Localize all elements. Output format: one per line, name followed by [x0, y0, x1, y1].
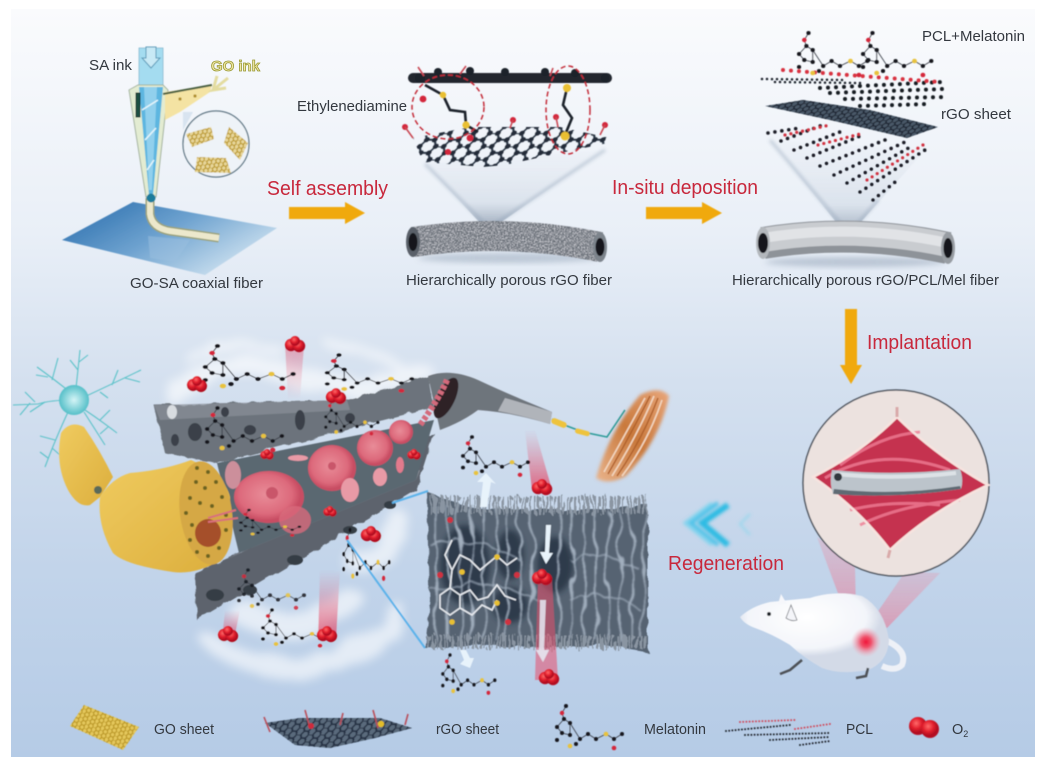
regeneration chevrons — [685, 503, 750, 545]
heading: Implantation: Implantation — [867, 332, 972, 354]
step 2: rGO sheets with ethylenediamine — [402, 66, 612, 225]
legend label: Melatonin: Melatonin — [644, 722, 706, 738]
nerve guide cross-section — [100, 458, 239, 572]
legend label: GO sheet: GO sheet — [154, 722, 214, 738]
step 3: rGO sheets with PCL and melatonin — [762, 31, 945, 232]
label: GO ink: GO ink — [211, 58, 261, 75]
arrow: implantation — [840, 309, 862, 384]
oxygen release beams — [222, 345, 552, 640]
inset: implanted fiber in muscle — [803, 390, 989, 576]
oxygen diffusion beam through wall — [535, 580, 558, 680]
label: porous rGO fiber: Hierarchically porous rGO fiber — [406, 273, 612, 289]
heading: Regeneration: Regeneration — [668, 553, 784, 575]
arrow: self assembly — [289, 202, 365, 224]
porous rGO fiber — [406, 227, 607, 263]
scaffold upper wall and tail — [154, 373, 552, 463]
blue zoom lines to insert — [347, 491, 428, 648]
heading: Self assembly: Self assembly — [267, 178, 388, 200]
inset: GO sheets circle — [183, 111, 249, 177]
insert: porous wall close-up — [425, 492, 648, 652]
regenerating cells — [225, 420, 413, 534]
legend label: PCL: PCL — [846, 722, 873, 738]
nerve stump — [59, 425, 113, 505]
heading: In-situ deposition: In-situ deposition — [612, 177, 758, 199]
regenerated nerve end and muscle — [550, 390, 669, 482]
arrow: in-situ deposition — [646, 202, 722, 224]
step 1: coaxial printing nozzle and substrate — [62, 47, 277, 275]
white diffusion arrows — [460, 473, 553, 668]
label: porous rGO/PCL/Mel fiber: Hierarchically porous rGO/PCL/Mel fiber — [732, 273, 999, 289]
label: rGO sheet: rGO sheet — [941, 107, 1011, 123]
label: SA ink: SA ink — [89, 58, 133, 74]
melatonin molecules around scaffold — [203, 344, 530, 695]
legend icons — [70, 705, 139, 750]
neuron — [13, 350, 141, 467]
legend label: O2: O — [952, 722, 963, 738]
hollow rGO/PCL/Mel fiber — [756, 227, 955, 267]
label: GO-SA coaxial fiber: GO-SA coaxial fiber — [130, 276, 263, 292]
pink zoom beam from rat to inset — [817, 537, 940, 628]
scaffold inner channel — [217, 420, 434, 553]
scaffold lower wall — [195, 433, 434, 620]
legend label: O2: 2 — [963, 729, 968, 739]
label: PCL+Melatonin: PCL+Melatonin — [922, 29, 1025, 45]
label: Ethylenediamine: Ethylenediamine — [297, 99, 407, 115]
legend label: rGO sheet: rGO sheet — [436, 722, 499, 738]
white vapour wisps behind scaffold — [175, 344, 420, 667]
rat — [740, 593, 903, 678]
oxygen molecules — [187, 336, 559, 685]
